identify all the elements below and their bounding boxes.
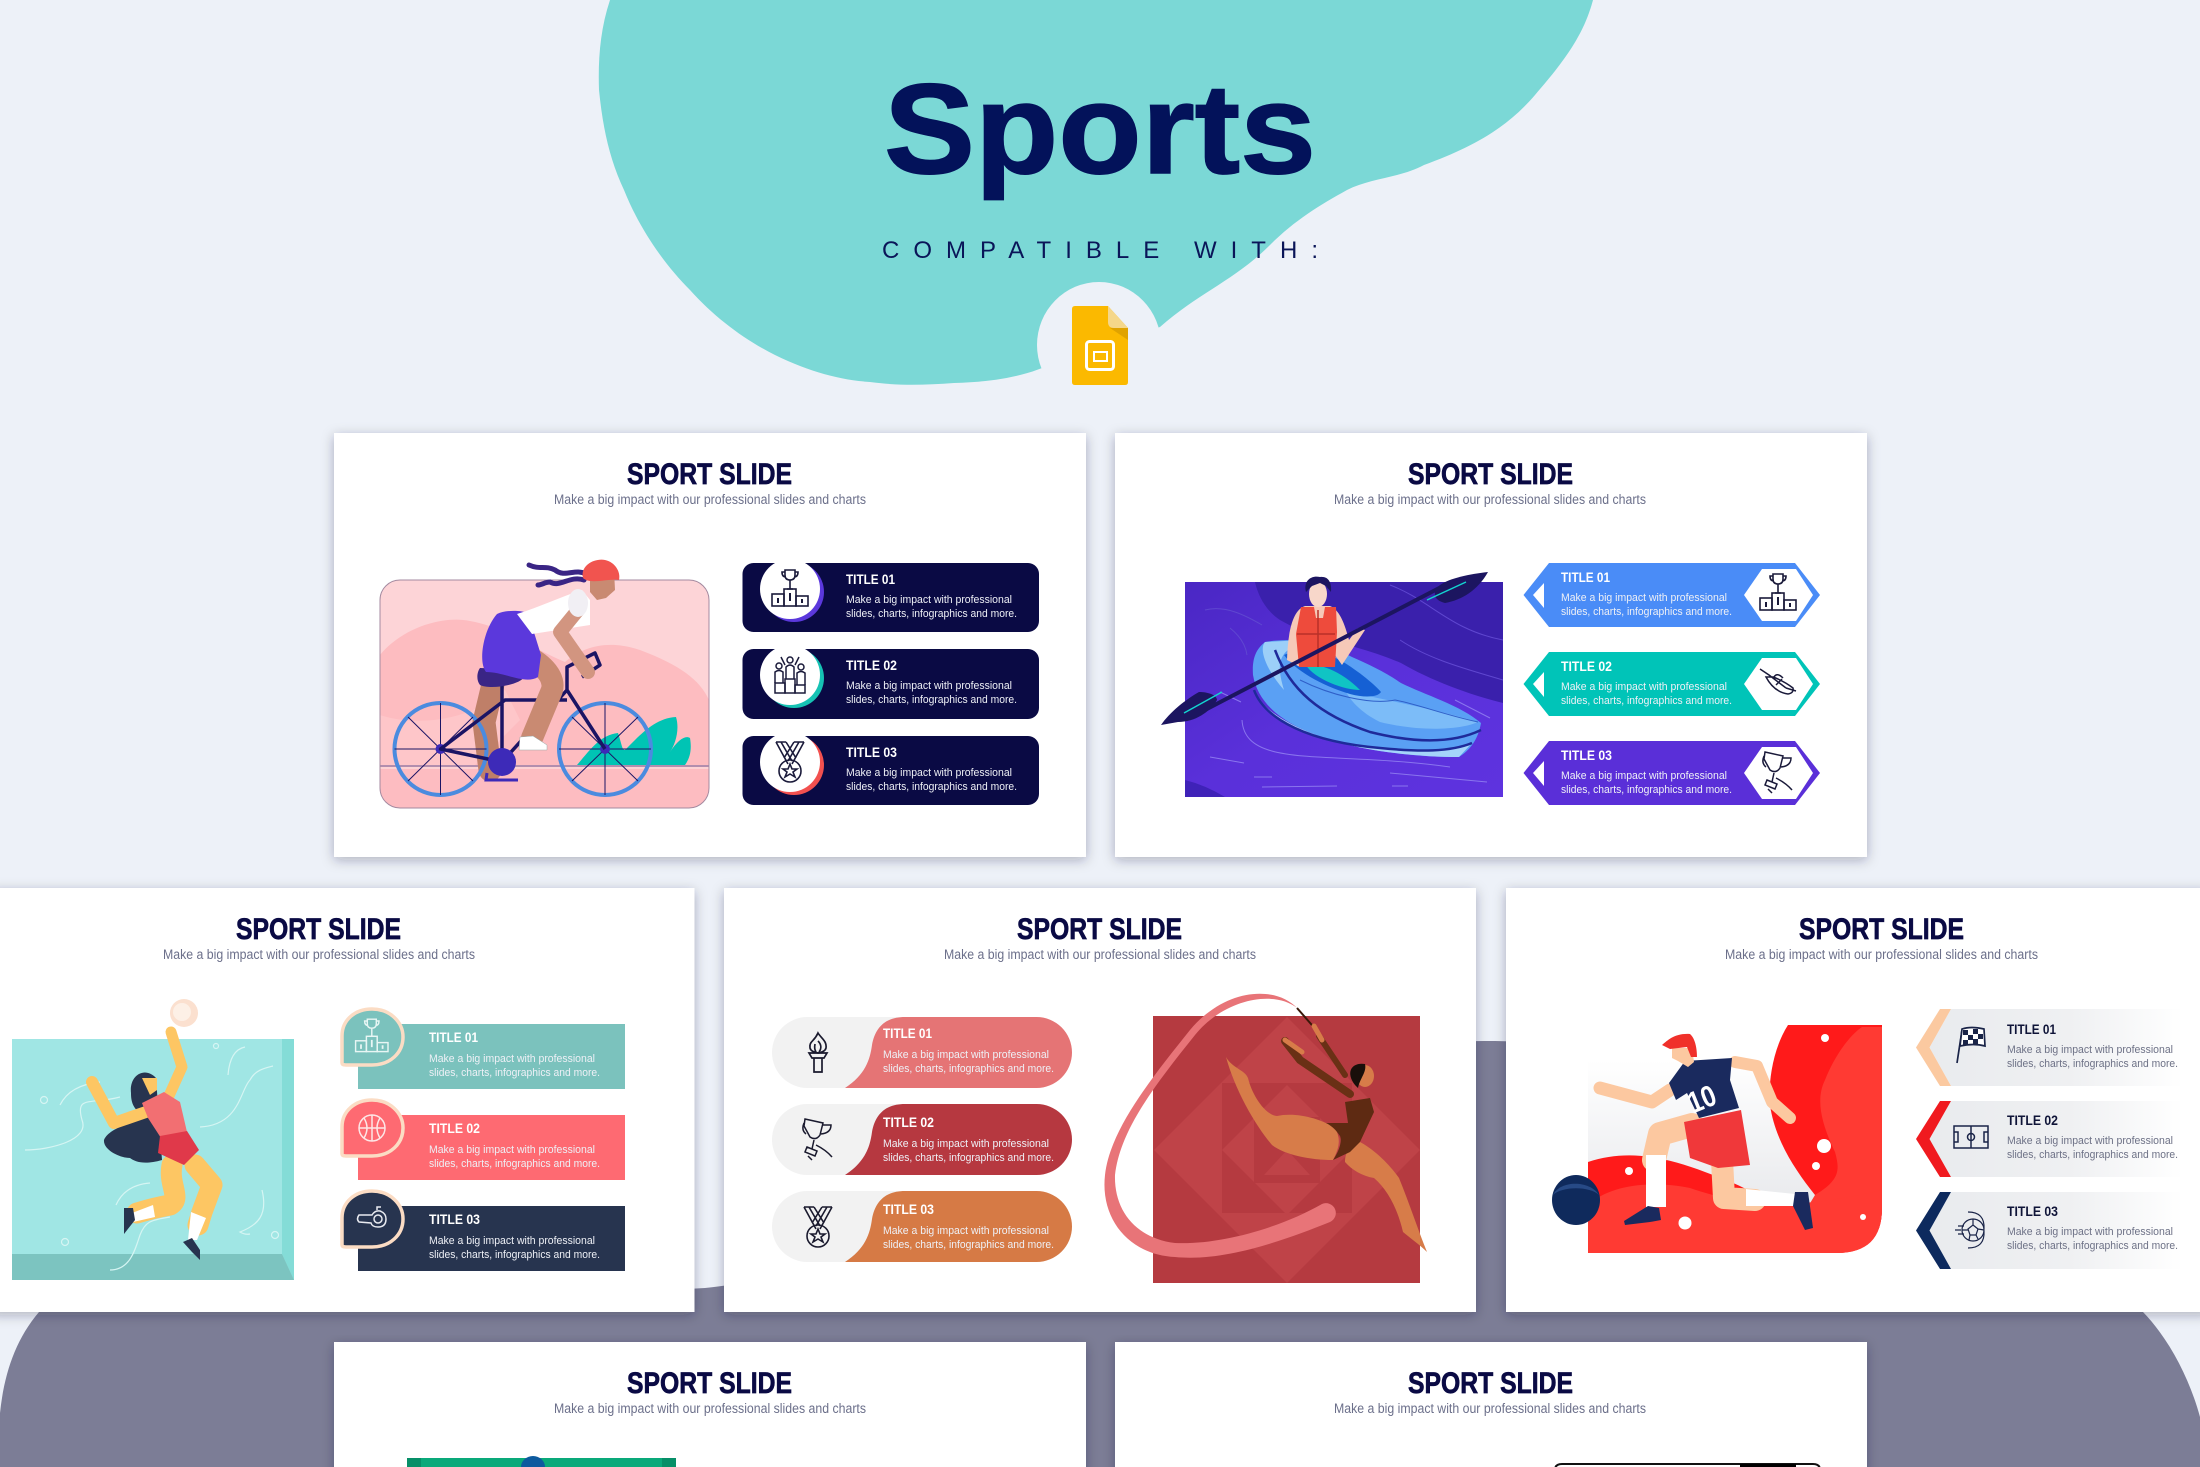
illustration: green field [407, 1456, 676, 1467]
list item 1: slides, charts, infographics and more. [883, 1063, 1054, 1075]
paddler [1287, 606, 1365, 667]
upper leg [1226, 1057, 1339, 1160]
arm [560, 610, 588, 672]
lower leg [1345, 1142, 1427, 1252]
helmet [583, 560, 619, 581]
braid [529, 565, 586, 585]
near leg [525, 655, 553, 738]
wheels [394, 703, 651, 795]
list item 3: slides, charts, infographics and more. [1561, 784, 1732, 796]
heading: SPORT SLIDE [627, 1367, 792, 1400]
list item 1: slides, charts, infographics and more. [429, 1067, 600, 1079]
list item 3 [742, 732, 1039, 805]
list item 1 [742, 559, 1039, 632]
list item 2: Make a big impact with professional [1561, 681, 1727, 693]
torso [517, 590, 590, 634]
arms [1600, 1088, 1670, 1102]
sub heading: Make a big impact with our professional slides and charts [554, 1401, 866, 1416]
shirt [1669, 1058, 1739, 1118]
list item 2: TITLE 02 [1561, 658, 1612, 674]
list item 3: Make a big impact with professional [2007, 1226, 2173, 1238]
kayak deck highlights [1263, 640, 1304, 690]
list item 2: slides, charts, infographics and more. [1561, 695, 1732, 707]
arms [1285, 1041, 1350, 1094]
list item 2: Make a big impact with professional [883, 1138, 1049, 1150]
sub heading: Make a big impact with our professional slides and charts [944, 947, 1256, 962]
dots [1625, 1034, 1866, 1230]
list item 3 [1916, 1192, 2183, 1269]
shirt number: 10 [1683, 1079, 1721, 1120]
head [1672, 1048, 1694, 1067]
list item 2: TITLE 02 [846, 657, 897, 673]
ball [170, 999, 198, 1027]
list item 2: Make a big impact with professional [2007, 1135, 2173, 1147]
list item 1: Make a big impact with professional [846, 594, 1012, 606]
panel: kayak slide [1115, 433, 1867, 857]
icon: google slides [1072, 306, 1128, 385]
list item 3: TITLE 03 [2007, 1203, 2058, 1219]
list item 2 [742, 645, 1039, 719]
shorts [158, 1131, 199, 1165]
list item 2 [342, 1100, 625, 1180]
heading: SPORT SLIDE [1408, 458, 1573, 491]
illustration: footballer [1552, 1025, 1882, 1260]
bike frame [440, 653, 605, 762]
list item 2: TITLE 02 [2007, 1112, 2058, 1128]
list item 1 [342, 1009, 625, 1089]
list item 1: TITLE 01 [2007, 1021, 2056, 1037]
shoes [124, 1208, 135, 1234]
ball [1552, 1175, 1600, 1225]
list item 1 [1916, 1009, 2183, 1086]
dark lower backdrop [0, 1041, 2200, 1467]
saddle [477, 668, 524, 687]
arms [92, 1082, 146, 1123]
list item 3: TITLE 03 [846, 744, 897, 760]
far leg [484, 680, 494, 770]
list item 2 [1524, 652, 1820, 716]
list item 3 [772, 1191, 1072, 1262]
list item 3: slides, charts, infographics and more. [2007, 1240, 2178, 1252]
heading: SPORT SLIDE [1017, 913, 1182, 946]
list item 1: TITLE 01 [883, 1025, 932, 1041]
list item 1: Make a big impact with professional [883, 1049, 1049, 1061]
list item 2: slides, charts, infographics and more. [846, 694, 1017, 706]
heading: SPORT SLIDE [627, 458, 792, 491]
illustration: volleyball player [12, 999, 294, 1280]
panel: football slide [1506, 888, 2200, 1312]
title: Sports [884, 58, 1316, 201]
sub heading: Make a big impact with our professional slides and charts [1334, 1401, 1646, 1416]
illustration: cyclist [380, 560, 709, 808]
list item 1: TITLE 01 [429, 1029, 478, 1045]
icon notch [1037, 282, 1161, 408]
head [590, 570, 615, 600]
sub heading: Make a big impact with our professional slides and charts [1725, 947, 2038, 962]
shorts [482, 611, 541, 680]
subtitle: compatible with: COMPATIBLE WITH: [882, 237, 1318, 264]
panel: cycling slide [334, 433, 1086, 857]
leotard [1326, 1098, 1374, 1160]
list item 2: TITLE 02 [883, 1114, 934, 1130]
panel: lower left slide [334, 1342, 1086, 1467]
list item 3: Make a big impact with professional [429, 1235, 595, 1247]
list item 2: TITLE 02 [429, 1120, 480, 1136]
front leg [1654, 1125, 1692, 1160]
legs [137, 1165, 175, 1213]
heading: SPORT SLIDE [1408, 1367, 1573, 1400]
hair [1662, 1034, 1697, 1057]
list item 2: slides, charts, infographics and more. [2007, 1149, 2178, 1161]
list item 3: slides, charts, infographics and more. [883, 1239, 1054, 1251]
list item 1: slides, charts, infographics and more. [846, 608, 1017, 620]
illustration: rhythmic gymnast [1104, 994, 1427, 1283]
list item 3: slides, charts, infographics and more. [429, 1249, 600, 1261]
list item 1: Make a big impact with professional [429, 1053, 595, 1065]
long hair [104, 1073, 162, 1163]
list item 1: Make a big impact with professional [2007, 1044, 2173, 1056]
list item 2: Make a big impact with professional [429, 1144, 595, 1156]
sub heading: Make a big impact with our professional slides and charts [163, 947, 475, 962]
list item 2: slides, charts, infographics and more. [883, 1152, 1054, 1164]
panel: lower right slide [1115, 1342, 1867, 1467]
list item 3: slides, charts, infographics and more. [846, 781, 1017, 793]
list item 2 [1916, 1101, 2183, 1177]
head [1356, 1065, 1374, 1087]
sub heading: Make a big impact with our professional slides and charts [1334, 492, 1646, 507]
paddle [1205, 585, 1445, 710]
wand [1297, 1008, 1318, 1032]
list item 3: Make a big impact with professional [846, 767, 1012, 779]
shirt [142, 1092, 187, 1138]
list item 1: TITLE 01 [1561, 569, 1610, 585]
list item 2 [772, 1104, 1072, 1175]
socks [132, 1205, 155, 1222]
shoe [519, 736, 547, 750]
list item 3: Make a big impact with professional [883, 1225, 1049, 1237]
list item 3: Make a big impact with professional [1561, 770, 1727, 782]
list item 3: TITLE 03 [1561, 747, 1612, 763]
list item 1 [1524, 563, 1820, 627]
back leg [1722, 1160, 1755, 1200]
shorts [1684, 1110, 1750, 1168]
list item 2: slides, charts, infographics and more. [429, 1158, 600, 1170]
list item 3: TITLE 03 [429, 1211, 480, 1227]
panel: gymnastics slide [724, 888, 1476, 1312]
list item 3 [342, 1191, 625, 1271]
list item 1: Make a big impact with professional [1561, 592, 1727, 604]
heading: SPORT SLIDE [236, 913, 401, 946]
list item 1: TITLE 01 [846, 571, 895, 587]
list item 1 [772, 1017, 1072, 1088]
list item 3: TITLE 03 [883, 1201, 934, 1217]
teal header blob [599, 0, 1593, 385]
list item 1: slides, charts, infographics and more. [1561, 606, 1732, 618]
list item 3 [1524, 741, 1820, 805]
sub heading: Make a big impact with our professional slides and charts [554, 492, 866, 507]
ribbon [1104, 994, 1336, 1258]
cockpit [1284, 652, 1381, 696]
list item 1: slides, charts, infographics and more. [2007, 1058, 2178, 1070]
illustration: kayaker [1161, 572, 1503, 797]
bush [577, 717, 691, 765]
list item 2: Make a big impact with professional [846, 680, 1012, 692]
kayak hull [1253, 640, 1481, 757]
illustration: outlined frame [1555, 1464, 1820, 1467]
heading: SPORT SLIDE [1799, 913, 1964, 946]
panel: volleyball slide [0, 888, 694, 1312]
